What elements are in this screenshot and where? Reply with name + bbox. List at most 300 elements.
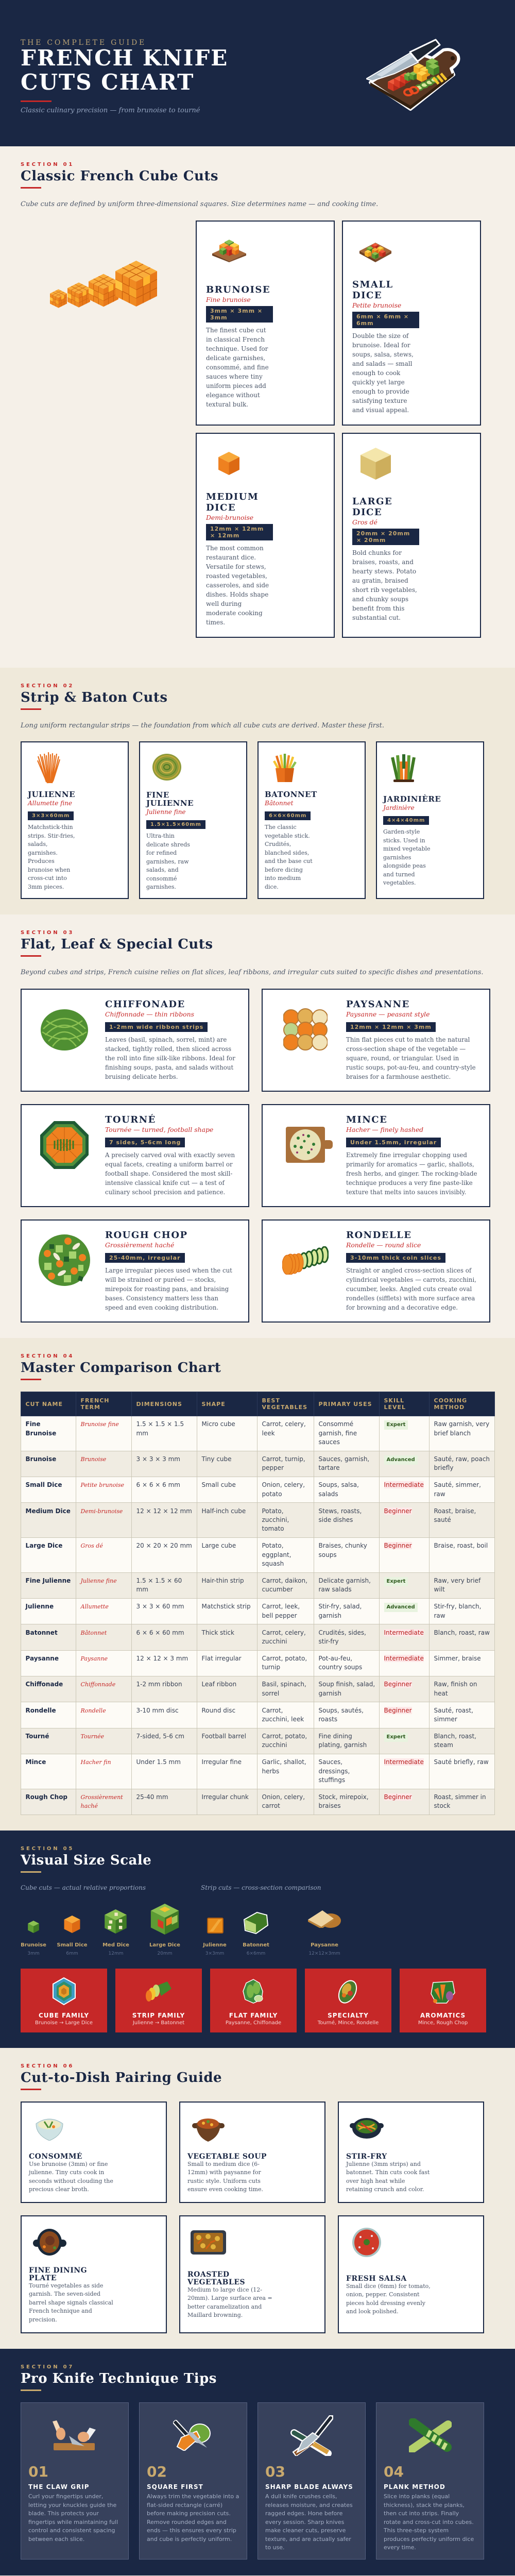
icon: chiffonade ribbons [41,1009,88,1050]
comparison table: leek [262,1430,275,1437]
icon: roasting tray [191,2230,226,2255]
card text: julienne [27,790,75,890]
card: batonnet [258,741,366,899]
family subtitle: Tourné, Mince, Rondelle [318,2020,379,2026]
card text: vegetable soup: Small to medium dice (6- [187,2161,260,2167]
card text: large dice: substantial cut. [352,614,401,621]
section intro: Long uniform rectangular strips — the foundation from which all cube cuts are derived. Master these first. [21,722,384,730]
scale label: brunoise [21,1942,46,1956]
scale label: medium dice [90,1942,142,1957]
icon: rough chopped vegetables [39,1234,90,1286]
scale label: batonnet: 6×6mm [247,1951,265,1956]
comparison table: Stock, mirepoix, [318,1793,369,1801]
family subtitle: Mince, Rough Chop [418,2020,468,2026]
card text: medium dice: Demi-brunoise [206,513,253,521]
card text: stir-fry: over high heat while [346,2178,405,2184]
comparison table: Fine dining [318,1733,352,1740]
card: stir-fry [338,2102,484,2203]
card text: large dice: braises, roasts, and [352,558,414,566]
scale label: paysanne [299,1942,350,1957]
comparison table: Intermediate [384,1655,424,1662]
comparison table: Bâtonnet [80,1630,107,1636]
card text: medium dice: times. [206,619,225,626]
tip text: square first: and cube is perfectly uniform. [147,2536,232,2542]
card text: julienne: JULIENNE [28,790,75,799]
comparison table: Roast, simmer in [434,1793,486,1801]
card text: large dice: and chunky soups [352,596,408,603]
card text: fine julienne: delicate shreds [146,841,190,848]
card text: brunoise: BRUNOISE [206,284,270,295]
comparison table: Large Dice [26,1542,62,1549]
card text: large dice: LARGE [352,496,392,507]
comparison table: 12 × 12 × 3 mm [136,1655,188,1662]
comparison table: brief blanch [434,1430,471,1437]
card text: medium dice: Versatile for stews, [206,563,266,570]
tip text: claw grip: control and consistent spacing [28,2527,115,2534]
card text: large dice: short rib vegetables, [352,586,417,594]
family card: aromatics [400,1969,486,2032]
comparison table: Roast, braise, [434,1507,476,1515]
section intro: Cube cuts are defined by uniform three-dimensional squares. Size determines name — and cooking time. [21,200,378,208]
icon: hands cutting on board [53,2420,96,2450]
card text: rondelle: cylindrical vegetables — carrots, zucchini, [346,1276,476,1283]
card: mince [262,1104,490,1207]
comparison table: herbs [262,1768,279,1775]
comparison table: zucchini [262,1638,287,1645]
icon: brunoise scale cube [28,1921,39,1933]
comparison table: Soup finish, salad, [318,1681,375,1688]
card text: fresh salsa: onion, pepper. Consistent [346,2291,419,2298]
card text: large dice: benefit from this [352,605,404,612]
card text: julienne: brunoise when [28,867,70,873]
section intro: Beyond cubes and strips, French cuisine relies on flat slices, leaf ribbons, and irregular cuts suited to specific dishes and presentations. [21,969,484,976]
illustration: four cube sizes [50,261,157,308]
section 01: classic French cube cuts [0,146,515,668]
card text: fine julienne: consommé [146,875,177,882]
card text: tourne: 7 sides, 5-6cm long [109,1139,181,1146]
section heading: Classic French Cube Cuts [21,168,218,184]
section 05: visual size scale [0,1831,515,2048]
scale label: large dice: 20mm [158,1951,172,1956]
section 04: master comparison chart [0,1338,515,1831]
heading rule [21,187,41,189]
scale label: large dice: Large Dice [149,1942,180,1948]
comparison table: Paysanne [26,1655,59,1662]
comparison table: Blanch, roast, [434,1733,476,1740]
card text: jardiniere [382,794,441,886]
tip text: sharp blade: A dull knife crushes cells, [265,2493,337,2500]
tip text: claw grip: Curl your fingertips under, [28,2493,103,2500]
card text: mince: fresh herbs, and ginger. The rocking-blade [346,1170,477,1177]
comparison table: Matchstick strip [202,1603,251,1610]
icon: batonnet cross-section [244,1912,268,1934]
card text: paysanne: PAYSANNE [346,998,410,1010]
comparison table: Brunoise [26,1430,56,1437]
card: vegetable soup [179,2102,325,2203]
section label: SECTION 03 [21,930,74,936]
comparison table: Onion, celery, [262,1793,305,1801]
card text: batonnet: Crudités, [265,841,291,848]
card text: consomme: precious clear broth. [29,2186,89,2193]
tip text: plank method: Slice into planks (equal [384,2493,450,2500]
card: consomme [21,2102,167,2203]
comparison table: sauté [434,1516,451,1523]
card text: rondelle: Rondelle — round slice [346,1241,421,1249]
card text: jardiniere: sticks. Used in [383,837,425,844]
card text: brunoise: Fine brunoise [206,296,251,303]
comparison table: Sauté, raw, poach [434,1455,490,1463]
scale label: brunoise: 3mm [27,1951,40,1956]
icon: braised dish [33,2228,66,2256]
comparison table: squash [262,1560,284,1567]
comparison table: 3 × 3 × 60 mm [136,1603,184,1610]
comparison table: Carrot, celery, [262,1629,306,1636]
scale label: julienne [189,1942,241,1957]
card text: small dice [352,279,419,414]
comparison table: Carrot, leek, [262,1603,300,1610]
section heading: Master Comparison Chart [21,1360,221,1376]
section heading: Cut-to-Dish Pairing Guide [21,2070,222,2086]
card text: rough chop: ROUGH CHOP [105,1229,188,1241]
comparison table: 6 × 6 × 60 mm [136,1629,184,1636]
comparison table: turnip [262,1664,280,1671]
family card: flat [210,1969,297,2032]
tip text: plank method: This three-step system [384,2527,449,2534]
tip text: plank method: rotate and cross-cut into cubes. [384,2518,474,2526]
card text: fine julienne: garnishes, raw [146,858,189,865]
card text: roasted vegetables: VEGETABLES [187,2278,245,2286]
card text: small dice: SMALL [352,279,393,290]
card text: stir-fry: retaining crunch and color. [346,2186,424,2193]
comparison table: Intermediate [384,1758,424,1766]
card text: chiffonade: Chiffonnade — thin ribbons [105,1010,194,1018]
card text: fresh salsa: FRESH SALSA [346,2274,407,2282]
card text: medium dice: casseroles, and side [206,582,269,589]
card: chiffonade [21,989,249,1092]
comparison table: roasts [318,1716,337,1723]
tip text: square first: before making precision cuts. [147,2510,231,2517]
card text: vegetable soup [187,2153,267,2194]
comparison table: zucchini, leek [262,1716,304,1723]
card text: julienne: 3mm pieces. [28,883,64,890]
comparison table: LEVEL [384,1404,406,1411]
card text: chiffonade: the roll into fine silk-like ribbons. Ideal for [105,1054,235,1061]
card text: medium dice: DICE [206,502,236,513]
card text: small dice: DICE [352,290,382,301]
card text: brunoise: sauces where tiny [206,373,263,380]
icon: julienne nest [152,754,181,781]
comparison table: Blanch, roast, raw [434,1629,490,1636]
comparison table: soups [318,1551,337,1558]
card text: fresh salsa: Small dice (6mm) for tomato, [346,2282,431,2290]
card text: tourne: football shape. Considered the most skill- [105,1170,232,1177]
title rule [21,100,52,102]
comparison table: stock [434,1802,450,1809]
comparison table: Simmer, braise [434,1655,481,1662]
comparison table: Round disc [202,1707,235,1714]
card text: large dice: hearty stews. Potato [352,568,416,575]
comparison table: stuffings [318,1776,345,1784]
card text: chiffonade [105,998,235,1080]
eyebrow: the complete guide: THE COMPLETE GUIDE [21,39,146,47]
family card: cube [21,1969,107,2032]
comparison table: Sauté, simmer, [434,1481,481,1488]
comparison table: Petite brunoise [80,1482,124,1488]
card text: batonnet: Bâtonnet [265,800,293,807]
icon: medium dice scale cube [105,1909,127,1934]
card text: julienne: salads, [28,841,47,848]
card text: small dice: 6mm [356,320,374,327]
comparison table: Beginner [384,1793,412,1801]
section label: SECTION 02 [21,683,74,689]
comparison table: Tournée [80,1733,104,1740]
icon: large dice scale cube [150,1904,179,1935]
comparison table: briefly [434,1464,453,1471]
card text: small dice: brunoise. Ideal for [352,342,410,349]
comparison table: country soups [318,1664,362,1671]
icon: orange cube [218,452,239,475]
section 02: strip and baton cuts [0,668,515,914]
comparison table: Soups, sautés, [318,1707,364,1714]
family card: specialty [305,1969,391,2032]
section heading: Pro Knife Technique Tips [21,2371,217,2386]
comparison table: sorrel [262,1690,279,1697]
icon: paysanne cross-section [308,1910,341,1928]
section label: SECTION 06 [21,2063,74,2069]
card text: large dice: DICE [352,507,382,517]
comparison table: Rondelle [26,1707,56,1714]
comparison table: Pot-au-feu, [318,1655,352,1662]
card text: fine dining plate: barrel shape signals classical [29,2299,113,2306]
card: roasted vegetables [179,2215,325,2333]
comparison table: 1.5 × 1.5 × 60 [136,1577,182,1584]
card text: vegetable soup: ensure even cooking time. [187,2186,263,2193]
card text: rough chop: speed and even cooking distribution. [105,1303,218,1311]
comparison table: 6 × 6 × 6 mm [136,1481,180,1488]
card text: medium dice: × 12mm [210,532,239,539]
card text: consomme: seconds without clouding the [29,2178,113,2184]
comparison table: eggplant, [262,1551,291,1558]
tip text: square first: flat-sided rectangle (carré) [147,2502,222,2508]
card text: small dice: and visual appeal. [352,406,409,414]
card text: consomme [29,2153,113,2194]
card text: medium dice: moderate cooking [206,609,263,617]
card text: rondelle: cucumber, leeks. Angled cuts create oval [346,1285,472,1292]
comparison table: Small Dice [26,1481,62,1488]
card: rondelle [262,1219,490,1323]
card text: roasted vegetables: better caramelization and [187,2303,262,2310]
comparison table: Julienne fine [80,1578,117,1584]
icon: sliced cucumber and carrot [146,1981,171,2002]
section 03: flat, leaf and special cuts [0,914,515,1338]
comparison table: Beginner [384,1507,412,1515]
comparison table: Beginner [384,1542,412,1549]
card text: rondelle: for browning and a decorative edge. [346,1303,458,1311]
comparison table: COOKING [434,1397,467,1404]
tip text: plank method: thickness), stack the planks, [384,2502,465,2508]
card text: paysanne: Thin flat pieces cut to match the natural [346,1036,470,1043]
tip card: plank method [376,2402,484,2560]
card text: medium dice: dishes. Holds shape [206,591,268,598]
card text: mince: Hacher — finely hashed [346,1125,423,1133]
icon: julienne cross-section [207,1918,224,1934]
comparison table: cucumber [262,1586,293,1593]
icon: specialty oval plate [336,1979,360,2004]
card text: tourne: Tournée — turned, football shape [105,1125,213,1133]
comparison table: Medium Dice [26,1507,71,1515]
comparison table: Braise, roast, boil [434,1542,488,1549]
comparison table: Paysanne [80,1655,108,1662]
card text: brunoise: delicate garnishes, [206,354,265,362]
comparison table: Demi-brunoise [80,1508,123,1515]
card text: fine julienne: 1.5×1.5×60mm [150,822,201,827]
comparison table: 20 × 20 × 20 mm [136,1542,192,1549]
card text: medium dice: The most common [206,545,264,552]
card text: rondelle: Straight or angled cross-section slices of [346,1266,471,1274]
comparison table: Sauces, [318,1758,342,1766]
section heading: Visual Size Scale [21,1853,151,1868]
caption: strip cuts: Strip cuts — cross-section comparison [201,1884,321,1891]
card: jardiniere [376,741,484,899]
tip text: claw grip: blade. This protects your [28,2510,99,2517]
card text: roasted vegetables: Maillard browning. [187,2312,243,2318]
comparison table: DIMENSIONS [136,1400,182,1408]
comparison table: Beginner [384,1681,412,1688]
heading rule [21,955,41,957]
comparison table: garnish, fine [318,1430,357,1437]
section heading: Flat, Leaf & Special Cuts [21,937,213,952]
tip text: claw grip [28,2464,118,2544]
comparison table: Large cube [202,1542,236,1549]
section label: SECTION 01 [21,162,74,167]
tagline: Classic culinary precision — from brunoise to tourné [21,107,200,114]
icon: small dice scale cube [64,1916,80,1933]
comparison table: Stir-fry, salad, [318,1603,362,1610]
scale label: julienne: 3×3mm [205,1951,224,1956]
comparison table: Irregular chunk [202,1793,249,1801]
comparison table: Carrot, daikon, [262,1577,307,1584]
card text: small dice: and salads — small [352,360,413,367]
card text: tourne: A precisely carved oval with exactly seven [105,1151,235,1158]
comparison table: Carrot, potato, [262,1733,307,1740]
card text: jardiniere: mixed vegetable [383,845,431,852]
card text: tourne: TOURNÉ [105,1114,156,1125]
comparison table: garnish [318,1690,341,1697]
icon: potato cube [360,448,391,480]
card text: vegetable soup: 12mm) with paysanne for [187,2169,261,2176]
tip text: sharp blade: make cleaner cuts, preserve [265,2527,346,2534]
icon: paysanne slices [283,1008,328,1050]
comparison table: raw [434,1490,445,1498]
card text: batonnet: vegetable stick. [265,833,310,839]
comparison table: SKILL [384,1397,404,1404]
scale label: large dice [139,1942,191,1957]
comparison table: Hair-thin strip [202,1577,244,1584]
card text: julienne: cross-cut into [28,875,67,882]
family card: strip [115,1969,202,2032]
card text: brunoise: 3mm [210,314,228,321]
card text: tourne: intensive classical knife cut — a test of [105,1179,225,1186]
card text: jardiniere: garnishes [383,854,411,860]
comparison table: raw salads [318,1586,352,1593]
comparison table: raw [434,1612,445,1619]
comparison table: Raw, very brief [434,1577,480,1584]
card text: small dice: 6mm × 6mm × [356,313,409,320]
scale label: small dice: Small Dice [57,1942,88,1948]
card: fresh salsa [338,2215,484,2333]
comparison table: Micro cube [202,1420,235,1428]
tip text: sharp blade [265,2464,353,2552]
tip text: sharp blade: every session. Sharp knives [265,2518,344,2526]
card text: jardiniere: 4×4×40mm [387,818,425,823]
comparison table: Brunoise [80,1456,106,1463]
main title: FRENCH KNIFE [21,45,228,71]
comparison table: Hacher fin [80,1759,111,1766]
comparison table: Fine [26,1420,40,1428]
card text: consomme: julienne. Tiny cuts cook in [29,2169,104,2176]
comparison table: zucchini, [262,1516,289,1523]
card text: brunoise: consommé, and fine [206,364,269,371]
icon: crossed cucumber planks [409,2418,452,2452]
card text: mince: texture that melts into sauces invisibly. [346,1188,466,1195]
card: tourne [21,1104,249,1207]
tip card: claw grip [21,2402,129,2560]
tip text: sharp blade: 03 [265,2463,285,2480]
tip card: square first [139,2402,247,2560]
card text: rough chop: Grossièrement haché [105,1241,174,1249]
comparison table: Chiffonnade [80,1681,115,1688]
family subtitle: Paysanne, Chiffonade [226,2020,281,2026]
comparison table: Expert [386,1734,405,1740]
comparison table: Small cube [202,1481,236,1488]
comparison table: Mince [26,1758,46,1766]
card text: jardiniere: Jardinière [383,804,415,811]
icon: glass bowl [35,2117,64,2141]
card text: medium dice: roasted vegetables, [206,572,267,580]
card: paysanne [262,989,490,1092]
card text: rough chop: will be strained or puréed — stocks, [105,1276,216,1283]
comparison table: Flat irregular [202,1655,242,1662]
comparison table: wilt [434,1586,445,1593]
card text: medium dice: restaurant dice. [206,554,256,561]
comparison table: Braises, chunky [318,1542,367,1549]
heading rule [21,2389,41,2391]
icon: soup pot [192,2117,225,2142]
tip text: plank method: 04 [384,2463,404,2480]
card text: chiffonade: Leaves (basil, spinach, sorrel, mint) are [105,1036,227,1043]
tip text: square first: ends — this ensures every strip [147,2527,236,2534]
card text: fresh salsa: and look polished. [346,2308,399,2315]
card text: brunoise: The finest cube cut [206,327,266,334]
comparison table: Potato, [262,1507,284,1515]
section heading: Strip & Baton Cuts [21,690,168,705]
family title: SPECIALTY [328,2012,369,2019]
comparison table: Delicate garnish, [318,1577,371,1584]
comparison table: Basil, spinach, [262,1681,306,1688]
card text: large dice [352,496,419,621]
card: rough chop [21,1219,249,1323]
main title: CUTS CHART [21,69,194,95]
comparison table: Garlic, shallot, [262,1758,306,1766]
card text: mince [346,1114,477,1195]
comparison table: mm [136,1586,148,1593]
family subtitle: Brunoise → Large Dice [35,2020,93,2026]
family title: FLAT FAMILY [229,2012,278,2019]
tip text: square first: Always trim the vegetable into a [147,2493,239,2500]
comparison table: PRIMARY USES [318,1400,372,1408]
card text: chiffonade: finishing soups, pasta, and salads without [105,1063,233,1071]
heading rule [21,708,41,710]
